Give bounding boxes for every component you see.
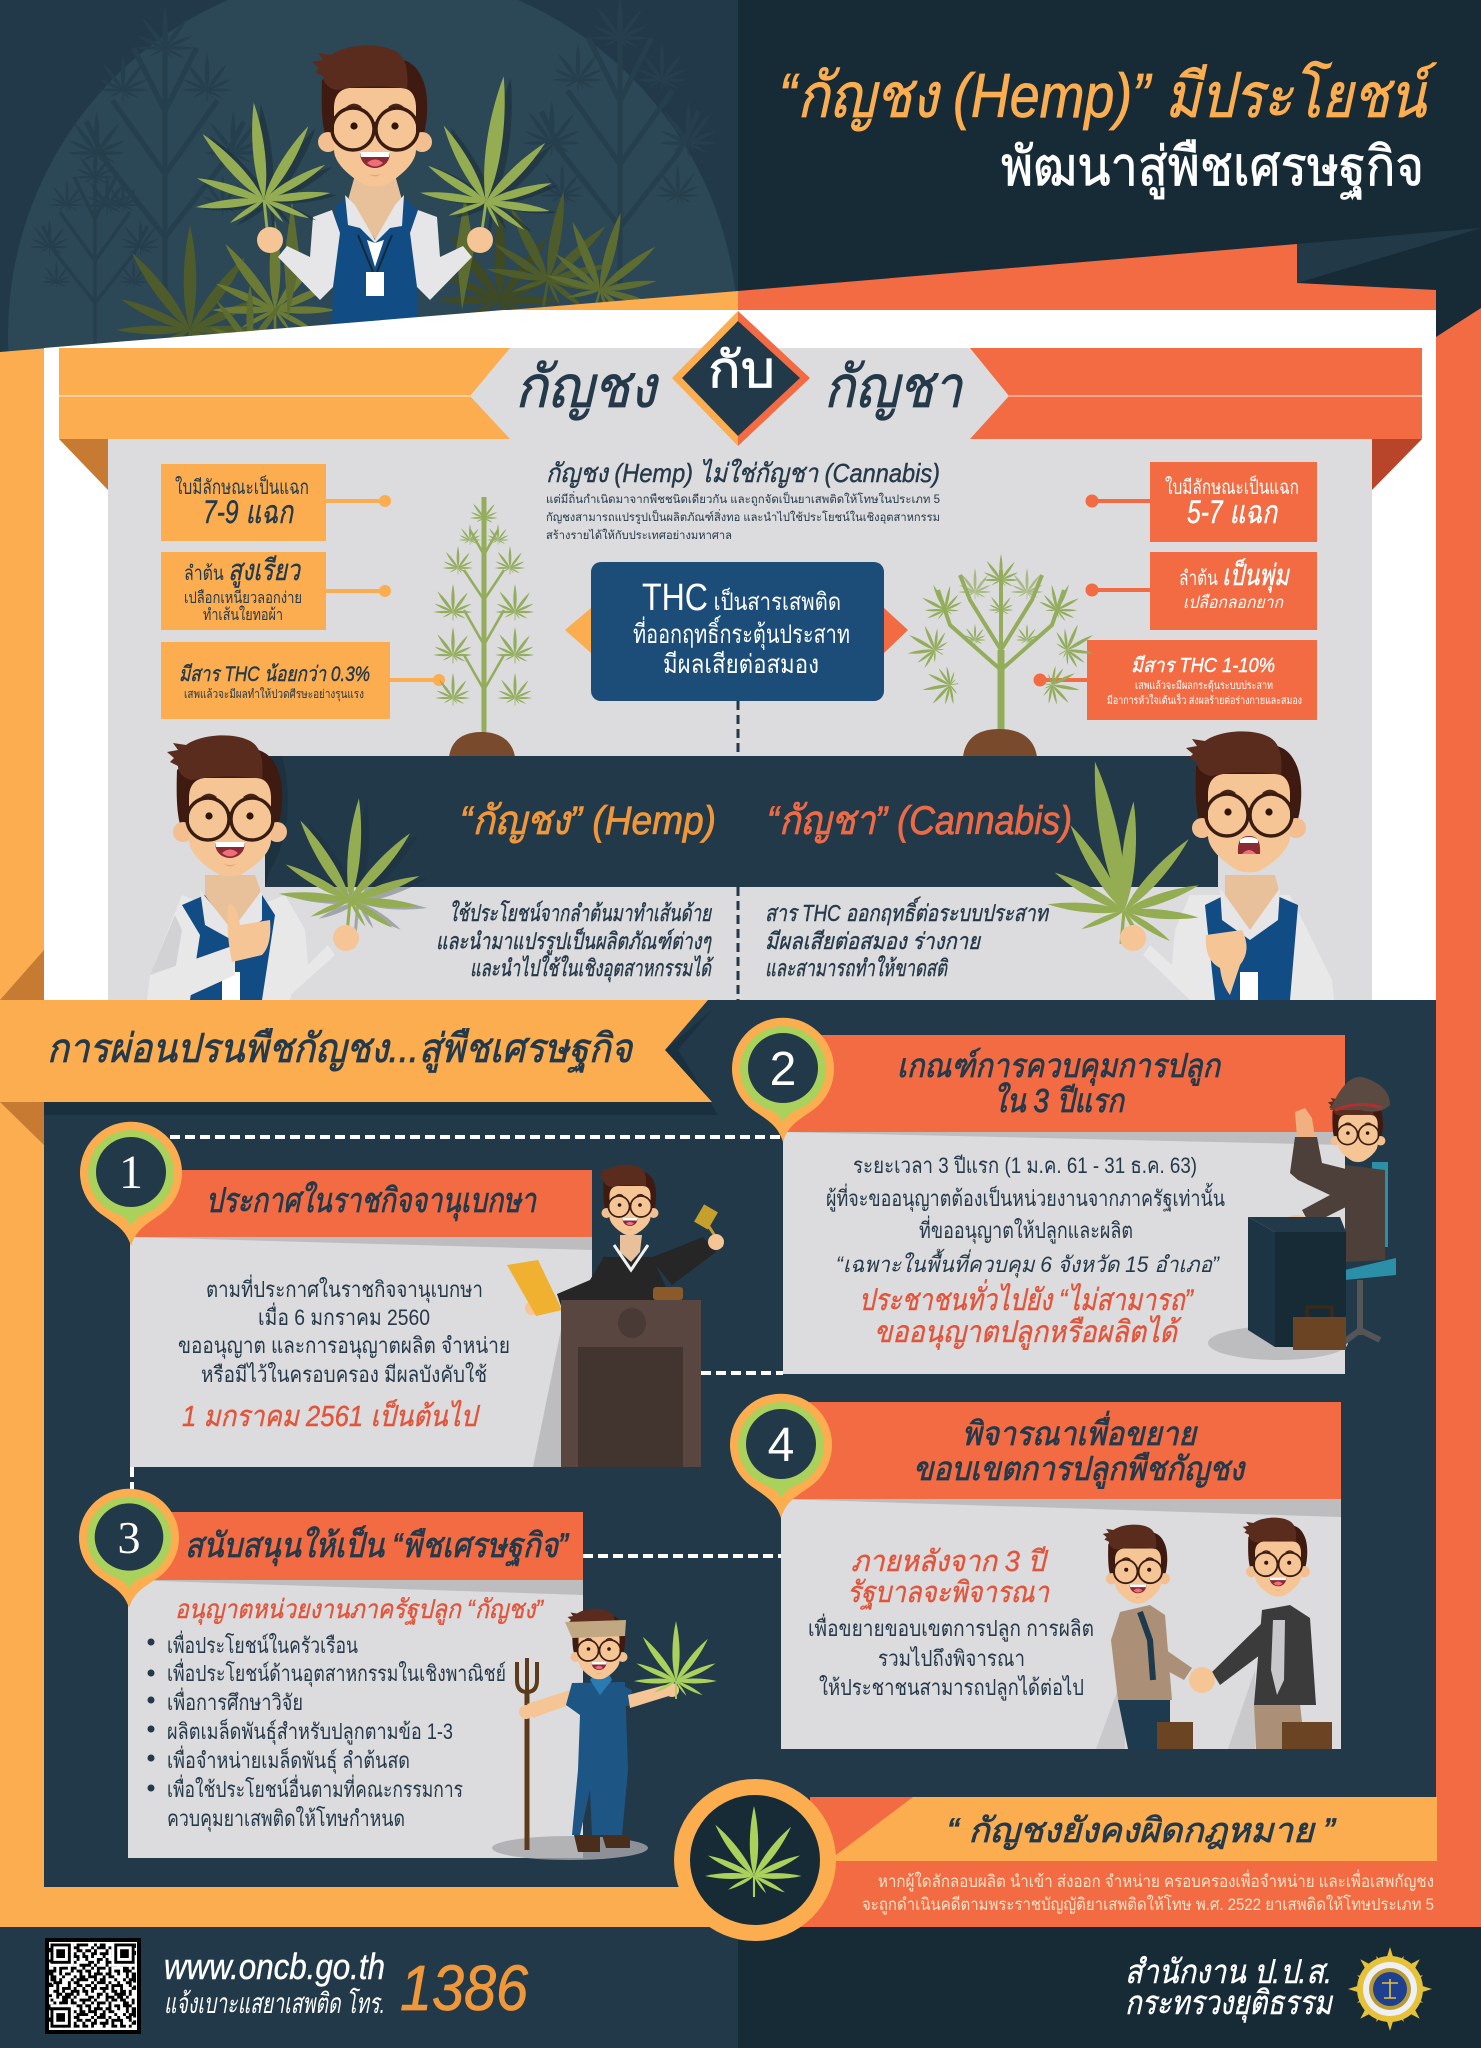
bullet list: เพื่อจำหน่ายเมล็ดพันธุ์ ลำต้นสด (167, 1745, 410, 1774)
hemp box: THC (161, 642, 445, 719)
dark comparison band: “กัญชง” (Hemp) (460, 799, 716, 844)
hemp box: stem: ลำต้น สูงเรียว (184, 555, 301, 588)
legal warning banner: “ กัญชงยังคงผิดกฎหมาย ” (947, 1812, 1337, 1850)
cannabis box: THC (1034, 640, 1317, 720)
THC callout box: THC เป็นสารเสพติด (642, 577, 841, 619)
hemp box: leaves: ใบมีลักษณะเป็นแฉก (175, 474, 309, 499)
diamond badge (672, 311, 810, 446)
footer: agency name: สำนักงาน ป.ป.ส. (1125, 1953, 1332, 1990)
desk (1248, 1217, 1275, 1347)
panel 4 body text: รัฐบาลจะพิจารณา (847, 1577, 1051, 1610)
cannabis harms text: มีผลเสียต่อสมอง ร่างกาย (765, 928, 981, 954)
bullet list: เพื่อประโยชน์ด้านอุตสาหกรรมในเชิงพาณิชย์ (167, 1658, 506, 1687)
cannabis soil (963, 729, 1037, 757)
character: happy thumbs-up man with hemp leaf (147, 735, 436, 1000)
panel 2: control criteria (732, 1018, 1396, 1374)
hemp box: THC: เสพแล้วจะมีผลทำให้ปวดศีรษะอย่างรุนแรง (184, 687, 364, 702)
cannabis leaf held (1044, 760, 1208, 951)
THC callout box (565, 562, 908, 701)
panel 2 body text: “เฉพาะในพื้นที่ควบคุม 6 จังหวัด 15 อำเภอ” (836, 1248, 1221, 1278)
diamond badge: กับ (708, 342, 775, 398)
background trees (30, 0, 717, 345)
ribbon heading: กัญชง กับ กัญชา: กัญชา (824, 355, 964, 421)
hemp benefits text: และนำมาแปรรูปเป็นผลิตภัณฑ์ต่างๆ (436, 927, 712, 955)
cannabis fact boxes (1034, 462, 1317, 720)
handshake characters (1096, 1518, 1332, 1749)
cannabis box: stem: ลำต้น เป็นพุ่ม (1179, 558, 1290, 593)
character: worried thumbs-down man with cannabis leaf (1044, 731, 1334, 1000)
cannabis harms text: สาร THC ออกฤทธิ์ต่อระบบประสาท (765, 896, 1049, 926)
cannabis harms text: และสามารถทำให้ขาดสติ (765, 955, 948, 981)
panel 4: expansion review: ขอบเขตการปลูกพืชกัญชง (913, 1450, 1247, 1489)
pin 3: 3 (118, 1512, 140, 1563)
panel 1 body text: 1 มกราคม 2561 เป็นต้นไป (182, 1399, 480, 1433)
footer: emblem (1331, 1930, 1449, 2048)
panel 3: economic crop support (79, 1489, 717, 1860)
hemp fact boxes (161, 464, 445, 719)
ribbon: right coral (970, 348, 1422, 490)
panel 2 body text: ระยะเวลา 3 ปีแรก (1 ม.ค. 61 - 31 ธ.ค. 63) (853, 1153, 1197, 1178)
ribbon: left orange (59, 348, 510, 490)
footer: website and hotline: แจ้งเบาะแสยาเสพติด โทร. (164, 1987, 385, 2019)
footer: website and hotline: 1386 (400, 1952, 528, 2024)
footer: agency name (1125, 1953, 1334, 2023)
panel 1: royal gazette (80, 1122, 724, 1467)
panel 1 body text: เมื่อ 6 มกราคม 2560 (258, 1302, 430, 1330)
hemp leaf held (279, 798, 427, 951)
panel 2 body text: ประชาชนทั่วไปยัง “ไม่สามารถ” (859, 1279, 1195, 1317)
pin 2 (732, 1018, 834, 1142)
white panel and grey comparison area (44, 310, 1436, 1000)
bullet list: เพื่อประโยชน์ในครัวเรือน (167, 1630, 358, 1658)
panel 4: expansion review (730, 1394, 1341, 1749)
cannabis box: THC: มีอาการหัวใจเต้นเร็ว ส่งผลร้ายต่อร่างกายและสมอง (1107, 693, 1302, 707)
pin 3 (79, 1489, 179, 1608)
hemp plant (433, 497, 534, 757)
panel 2 body text: ขออนุญาตปลูกหรือผลิตได้ (874, 1315, 1182, 1350)
officer character at desk (1208, 1077, 1396, 1360)
center explanation text: สร้างรายได้ให้กับประเทศอย่างมหาศาล (546, 529, 732, 542)
panel 2 body text (826, 1153, 1225, 1350)
pin 1 (80, 1122, 182, 1246)
THC callout box: ที่ออกฤทธิ์กระตุ้นประสาท (633, 615, 850, 650)
panel 1 body text: หรือมีไว้ในครอบครอง มีผลบังคับใช้ (201, 1362, 487, 1387)
podium (561, 1300, 701, 1467)
pin 1: 1 (119, 1146, 143, 1199)
panel 1: royal gazette: ประกาศในราชกิจจานุเบกษา (206, 1181, 537, 1221)
panel 1 body text: ขออนุญาต และการอนุญาตผลิต จำหน่าย (178, 1333, 510, 1359)
farmer's leaf (634, 1621, 717, 1699)
cannabis box: stem (1086, 552, 1317, 630)
main title (779, 61, 1437, 199)
panel 2 body text: ที่ขออนุญาตให้ปลูกและผลิต (919, 1215, 1133, 1244)
cannabis box: leaves: ใบมีลักษณะเป็นแฉก (1165, 474, 1299, 499)
man in tan suit (1103, 1525, 1193, 1749)
cannabis harms text (765, 896, 1049, 981)
panel 4 body text: รวมไปถึงพิจารณา (878, 1646, 1025, 1671)
cannabis plant (899, 554, 1103, 757)
panel 4: expansion review: พิจารณาเพื่อขยาย (962, 1411, 1198, 1452)
center explanation text: กัญชง (Hemp) ไม่ใช่กัญชา (Cannabis) (546, 458, 940, 488)
bullet list: ผลิตเมล็ดพันธุ์สำหรับปลูกตามข้อ 1-3 (167, 1717, 453, 1745)
bullet list: เพื่อใช้ประโยชน์อื่นตามที่คณะกรรมการ (167, 1774, 463, 1802)
center explanation text (546, 458, 940, 542)
pin 2: 2 (770, 1043, 796, 1096)
footer: agency name: กระทรวงยุติธรรม (1125, 1984, 1334, 2023)
ribbon heading: กัญชง กับ กัญชา (515, 311, 964, 446)
footer: website and hotline (164, 1946, 528, 2024)
THC callout box: มีผลเสียต่อสมอง (663, 649, 819, 679)
panel 2: control criteria: ใน 3 ปีแรก (993, 1082, 1126, 1119)
held leaves (204, 79, 558, 232)
dark comparison band (265, 701, 1218, 1000)
hemp box: stem: ทำเส้นใยทอผ้า (203, 605, 283, 624)
hemp benefits text: และนำไปใช้ในเชิงอุตสาหกรรมได้ (470, 955, 714, 982)
ribbon heading: กัญชง กับ กัญชา: กัญชง (515, 355, 659, 421)
hemp box: THC: มีสาร THC น้อยกว่า 0.3% (179, 663, 370, 686)
hemp box: leaves: 7-9 แฉก (203, 494, 294, 530)
main title: พัฒนาสู่พืชเศรษฐกิจ (1001, 137, 1424, 199)
panel 4 body text: ภายหลังจาก 3 ปี (851, 1546, 1048, 1578)
legal warning banner (674, 1779, 1481, 1941)
panel 2: control criteria: เกณฑ์การควบคุมการปลูก (897, 1047, 1222, 1086)
dark green bushes (117, 192, 656, 338)
bullet list (148, 1630, 506, 1832)
presenter character (186, 45, 570, 330)
dark comparison band: “กัญชา” (Cannabis) (767, 799, 1072, 844)
cannabis box: leaves: 5-7 แฉก (1187, 494, 1278, 530)
man in dark suit (1212, 1518, 1332, 1749)
cannabis box: leaves (1086, 462, 1317, 542)
hero scene: forest dome, plants and presenter (8, 0, 735, 351)
panel 4 body text: เพื่อขยายขอบเขตการปลูก การผลิต (808, 1613, 1094, 1642)
hemp soil (449, 732, 515, 757)
forest dome (8, 0, 735, 351)
bullet list: เพื่อการศึกษาวิจัย (167, 1687, 303, 1715)
leaf badge (674, 1779, 836, 1941)
section background and dashed connectors (0, 950, 1436, 1927)
footer: website and hotline: www.oncb.go.th (164, 1946, 385, 1987)
section banner: การผ่อนปรนพืชกัญชง...สู่พืชเศรษฐกิจ (47, 1027, 633, 1073)
panel 1 body text: ตามที่ประกาศในราชกิจจานุเบกษา (206, 1274, 483, 1303)
pin 4 (730, 1394, 832, 1518)
hemp benefits text: ใช้ประโยชน์จากลำต้นมาทำเส้นด้าย (449, 900, 712, 926)
cannabis box: THC: มีสาร THC 1-10% (1131, 655, 1275, 677)
judge character at podium (507, 1165, 724, 1467)
pin 4: 4 (768, 1419, 794, 1472)
panel 4 body text (808, 1546, 1094, 1701)
farmer character (492, 1609, 717, 1860)
footer: QR code (45, 1938, 141, 2034)
section banner (0, 1000, 718, 1145)
panel 3: economic crop support: อนุญาตหน่วยงานภาครัฐปลูก “กัญชง” (175, 1594, 544, 1625)
panel 3: economic crop support: สนับสนุนให้เป็น “พืชเศรษฐกิจ” (185, 1525, 569, 1566)
panel 2 body text: ผู้ที่จะขออนุญาตต้องเป็นหน่วยงานจากภาครัฐเท่านั้น (826, 1183, 1225, 1212)
panel 1 body text (178, 1274, 510, 1433)
hemp benefits text (436, 900, 714, 982)
cannabis box: THC: เสพแล้วจะมีผลกระตุ้นระบบประสาท (1135, 679, 1273, 692)
hemp box: leaves (161, 464, 391, 541)
center explanation text: กัญชงสามารถแปรรูปเป็นผลิตภัณฑ์สิ่งทอ และนำไปใช้ประโยชน์ในเชิงอุตสาหกรรม (546, 509, 940, 524)
cannabis box: stem: เปลือกลอกยาก (1183, 593, 1284, 612)
bullet list: ควบคุมยาเสพติดให้โทษกำหนด (167, 1806, 405, 1832)
center explanation text: แต่มีถิ่นกำเนิดมาจากพืชชนิดเดียวกัน และถูกจัดเป็นยาเสพติดให้โทษในประเภท 5 (546, 491, 940, 506)
briefcase (1293, 1317, 1346, 1350)
hemp box: stem (161, 552, 391, 630)
hemp box: stem: เปลือกเหนียวลอกง่าย (184, 589, 302, 607)
panel 4 body text: ให้ประชาชนสามารถปลูกได้ต่อไป (819, 1675, 1084, 1701)
